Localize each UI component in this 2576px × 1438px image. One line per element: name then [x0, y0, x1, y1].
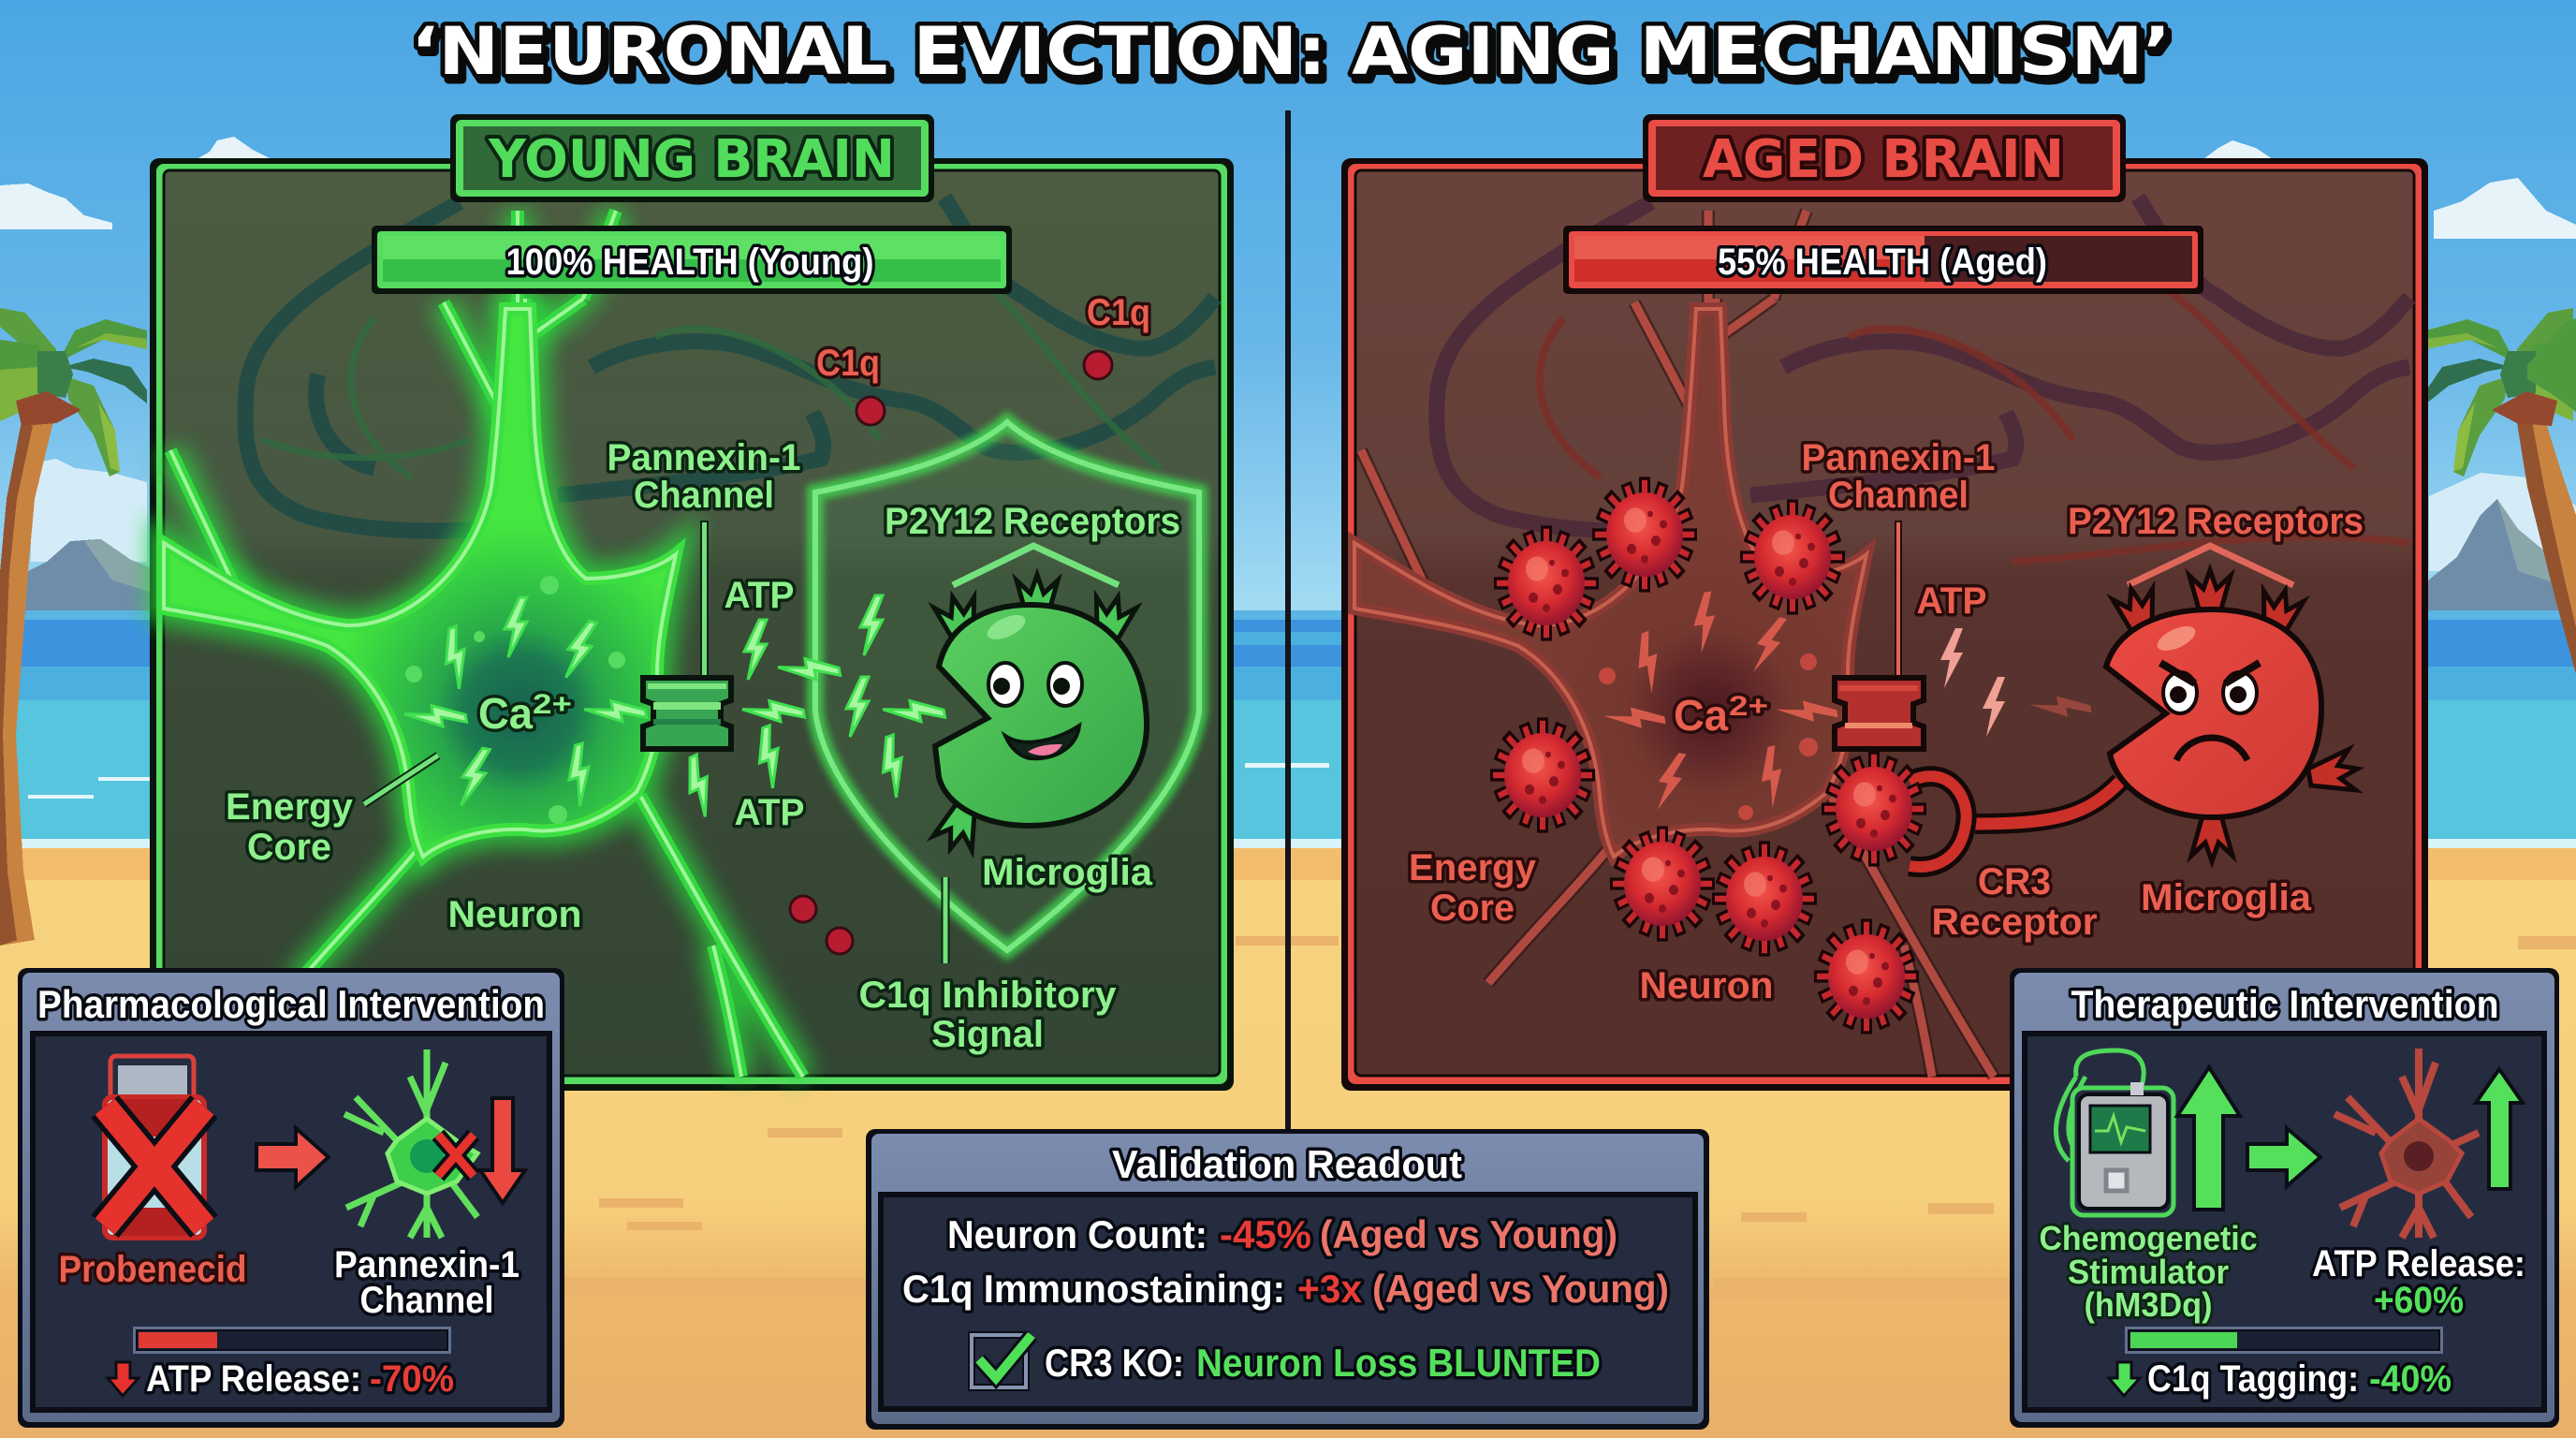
label: chemogenetic stimulator: [2039, 1219, 2258, 1324]
labels: aged brain: Core: [1430, 888, 1515, 929]
health bar: aged: 55% HEALTH (Aged): [1718, 242, 2047, 283]
label: pannexin-1 channel: Pannexin-1: [334, 1244, 520, 1285]
labels: young brain: C1q Inhibitory: [859, 975, 1117, 1016]
heading tab: aged brain: [1643, 114, 2126, 202]
C1q immunostaining row: [902, 1267, 1669, 1311]
neuron count row: -45%: [1220, 1212, 1311, 1256]
labels: aged brain: Ca: [1674, 691, 1728, 740]
readout: ATP release: +60%: [2374, 1280, 2464, 1321]
heading: Therapeutic Intervention: [2071, 982, 2499, 1026]
labels: aged brain: Neuron: [1640, 965, 1773, 1006]
CR3 KO row: CR3 KO:: [1045, 1341, 1184, 1385]
readout: C1q tagging: [2109, 1358, 2452, 1400]
panel: therapeutic intervention: [2010, 968, 2559, 1428]
progress bar: C1q tagging: [2125, 1327, 2443, 1354]
labels: young brain: Pannexin-1: [607, 437, 801, 478]
heading: Validation Readout: [1112, 1142, 1462, 1186]
shield: [815, 422, 1199, 950]
health bar: young: 100% HEALTH (Young): [505, 242, 874, 283]
labels: young brain: Neuron: [447, 894, 582, 935]
arrow: [2247, 1128, 2320, 1186]
sea: [0, 610, 2576, 620]
heading tab: aged brain: AGED BRAIN: [1703, 129, 2064, 190]
readout: C1q tagging: C1q Tagging:: [2147, 1358, 2359, 1400]
neuron count row: Neuron Count:: [947, 1212, 1208, 1256]
left palm tree: [0, 308, 147, 946]
C1q particles: [790, 351, 1112, 954]
labels: aged brain: CR3: [1978, 861, 2051, 902]
icon: crossed-out probenecid bottle: [105, 1056, 204, 1238]
heading tab: young brain: YOUNG BRAIN: [488, 129, 895, 190]
icon: aged neuron: [2334, 1049, 2479, 1238]
neuron count row: (Aged vs Young): [1320, 1212, 1617, 1256]
labels: young brain: 2+: [533, 689, 572, 720]
labels: young brain: Ca: [478, 689, 533, 738]
panel: validation readout: [866, 1129, 1709, 1430]
energy bolts and ATP: [403, 595, 945, 818]
icon: blocked neuron: [344, 1049, 477, 1238]
labels: young brain: Channel: [634, 475, 774, 516]
neuron count row: [947, 1212, 1617, 1256]
readout: ATP release: ATP Release:: [146, 1358, 361, 1400]
labels: young brain: P2Y12 Receptors: [885, 501, 1180, 542]
labels: aged brain: P2Y12 Receptors: [2068, 501, 2364, 542]
CR3 KO row: Neuron Loss BLUNTED: [1196, 1341, 1601, 1385]
label: chemogenetic stimulator: (hM3Dq): [2084, 1285, 2213, 1324]
icon: check box: [972, 1335, 1032, 1387]
pannexin-1 channel: [643, 521, 731, 749]
C1q immunostaining row: C1q Immunostaining:: [902, 1267, 1285, 1311]
label: probenecid: Probenecid: [58, 1249, 247, 1290]
readout: ATP release: [108, 1358, 454, 1400]
labels: young brain: Microglia: [982, 852, 1153, 893]
labels: aged brain: 2+: [1729, 691, 1768, 722]
sand: [0, 848, 2576, 1438]
weak energy bolts: [1603, 592, 2092, 814]
brain folds: [1437, 198, 2409, 531]
label: pannexin-1 channel: [334, 1244, 520, 1321]
mountains: [0, 499, 2576, 610]
labels: young brain: C1q: [1087, 292, 1150, 333]
icon: small green up arrow: [2476, 1069, 2523, 1189]
centre divider: [1285, 110, 1291, 1133]
C1q immunostaining row: (Aged vs Young): [1372, 1267, 1669, 1311]
label: pannexin-1 channel: Channel: [359, 1280, 494, 1321]
labels: young brain: [226, 292, 1180, 1055]
icon: big green up arrow: [2177, 1067, 2240, 1210]
clouds: [0, 137, 2576, 571]
labels: aged brain: [1409, 437, 2364, 1006]
labels: young brain: Energy: [226, 786, 354, 828]
labels: aged brain: Pannexin-1: [1801, 437, 1996, 478]
readout: C1q tagging: -40%: [2369, 1358, 2452, 1400]
title: ‘NEURONAL EVICTION: AGING MECHANISM’: [415, 19, 2174, 95]
right palm tree: [2426, 308, 2576, 674]
label: chemogenetic stimulator: Stimulator: [2068, 1253, 2229, 1291]
labels: aged brain: Microglia: [2141, 877, 2312, 918]
labels: aged brain: ATP: [1917, 580, 1986, 622]
complement receptor arm: [1910, 776, 2120, 867]
readout: ATP release: ATP Release:: [2312, 1243, 2525, 1284]
labels: aged brain: Receptor: [1932, 902, 2097, 943]
labels: aged brain: Channel: [1828, 475, 1969, 516]
labels: young brain: Signal: [931, 1014, 1044, 1055]
health bar: young: [372, 226, 1012, 294]
neuron: [1354, 211, 1994, 1077]
C1q tagged viral particles: [1490, 477, 1926, 1034]
pannexin-1 channel: [1835, 521, 1924, 749]
readout: ATP release: -70%: [370, 1358, 454, 1400]
arrow: [256, 1128, 329, 1187]
heading tab: young brain: [450, 114, 934, 202]
icon: red down arrow: [480, 1098, 525, 1203]
health bar: aged: [1563, 226, 2203, 294]
panel: aged brain: [1341, 114, 2428, 1091]
labels: young brain: Core: [247, 827, 331, 868]
readout: ATP release: [2312, 1243, 2525, 1321]
neuron: [164, 211, 803, 1077]
label: chemogenetic stimulator: Chemogenetic: [2039, 1219, 2258, 1257]
heading: Pharmacological Intervention: [37, 982, 545, 1026]
CR3 KO row: [1045, 1341, 1601, 1385]
panel: young brain: [150, 114, 1234, 1091]
icon: chemogenetic stimulator device: [2056, 1050, 2174, 1215]
progress bar: ATP release: [133, 1327, 451, 1354]
angry microglia: [2106, 546, 2361, 861]
labels: young brain: C1q: [816, 343, 880, 384]
microglia: [931, 546, 1147, 856]
C1q immunostaining row: +3x: [1297, 1267, 1363, 1311]
panel: pharmacological intervention: [18, 968, 564, 1428]
labels: aged brain: Energy: [1409, 847, 1537, 888]
brain folds: [245, 198, 1215, 531]
labels: young brain: ATP: [724, 575, 794, 616]
labels: young brain: ATP: [734, 792, 805, 833]
title: ‘NEURONAL EVICTION: AGING MECHANISM’: [411, 13, 2171, 90]
